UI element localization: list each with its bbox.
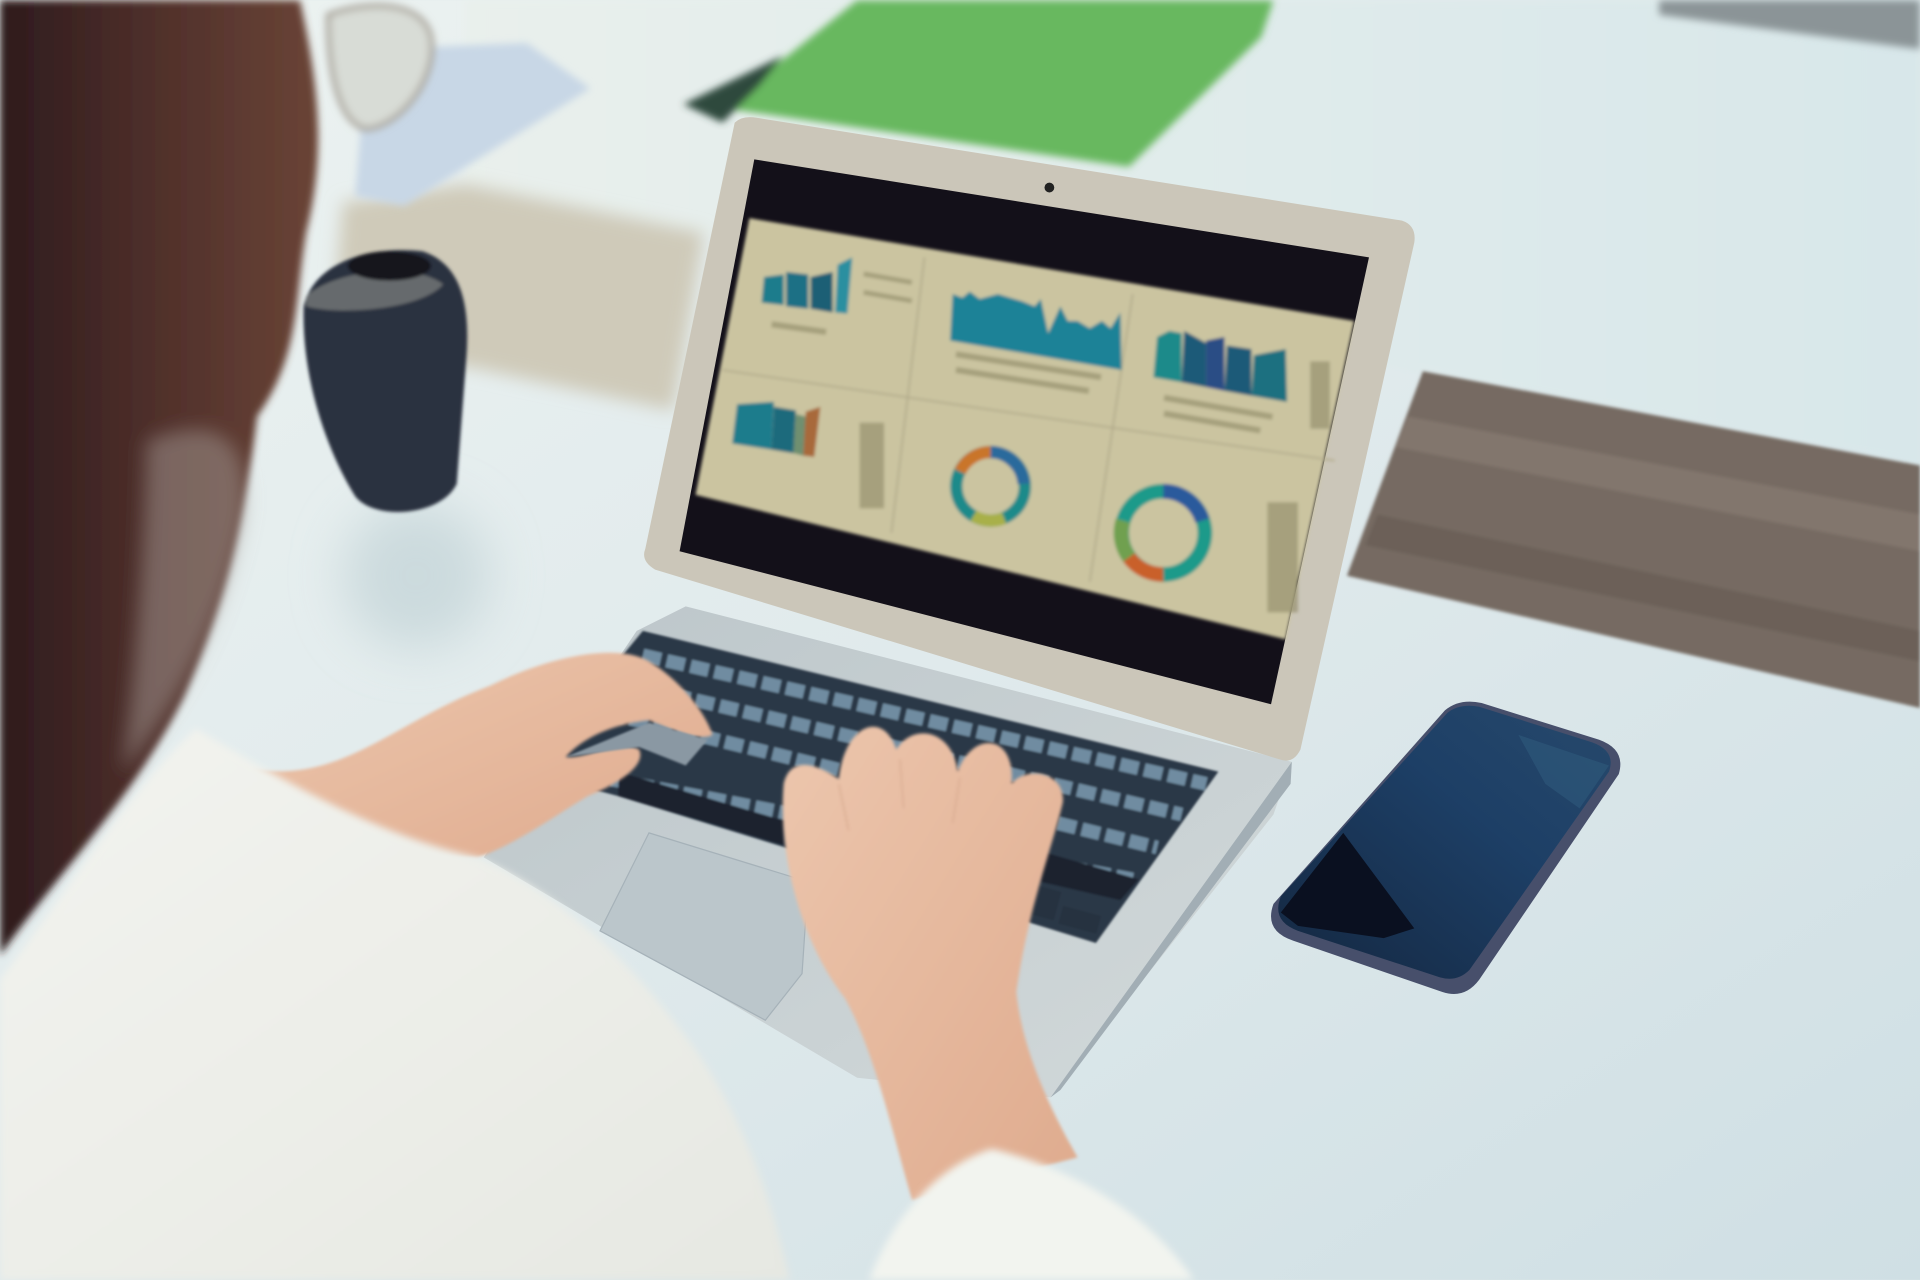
woman's right hand on the keyboard (783, 727, 1078, 1200)
laptop lid bezel (644, 117, 1415, 761)
dashboard on screen (696, 218, 1354, 639)
webcam (1044, 183, 1054, 192)
dashboard panel dividers (722, 257, 1335, 582)
coffee cup (304, 250, 467, 512)
dashboard area chart: top centre (950, 292, 1122, 370)
dashboard bar chart: top right (1153, 331, 1287, 402)
woman's left hand on the keyboard (251, 653, 713, 857)
white sweater (0, 729, 1194, 1280)
trackpad (600, 833, 808, 1020)
wood strip right of the laptop (1347, 371, 1920, 708)
dashboard bar chart: top left (762, 257, 852, 314)
dashboard bar chart: bottom left (732, 402, 820, 457)
upper background table (465, 0, 1920, 466)
lit keys between thumb and fingers (566, 723, 708, 766)
laptop base (484, 606, 1292, 1097)
keyboard (527, 631, 1218, 943)
dashboard legends and captions (771, 271, 1330, 612)
dashboard donut chart: right (1121, 491, 1205, 574)
green folder (683, 0, 1273, 167)
paper notes on the table (355, 43, 590, 206)
smartphone (1271, 702, 1620, 994)
dashboard donut chart: centre (956, 452, 1025, 521)
dark object at top right edge (1659, 0, 1920, 49)
hair (0, 0, 318, 955)
glasses (328, 6, 432, 129)
cup shadow (343, 502, 490, 649)
wood strip behind the laptop (331, 184, 704, 410)
laptop screen black surround (680, 159, 1369, 704)
